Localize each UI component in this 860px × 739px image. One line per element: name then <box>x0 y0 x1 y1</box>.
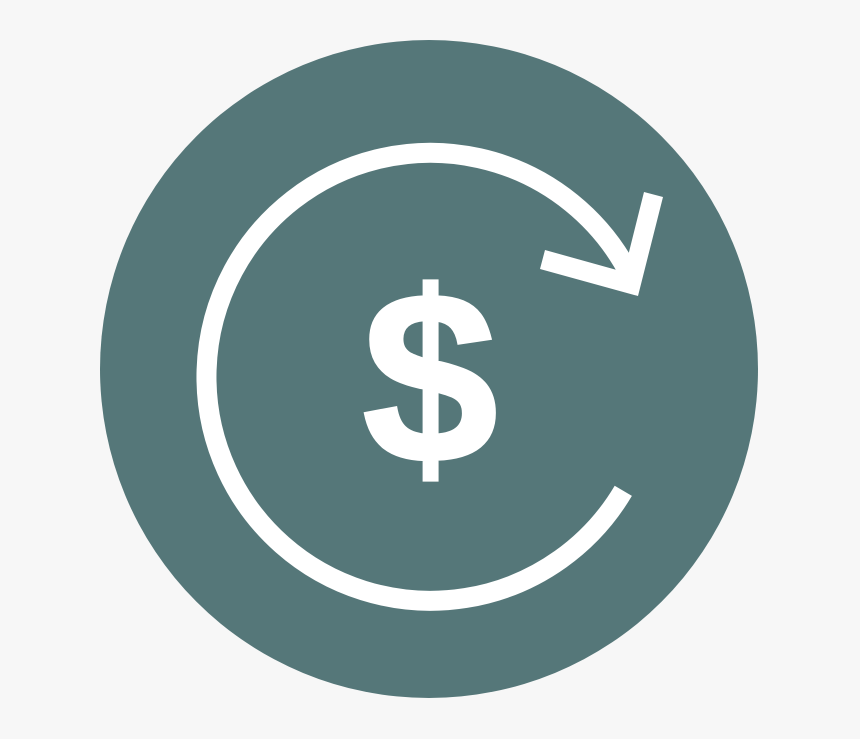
arrowhead <box>540 192 663 296</box>
circular arrow <box>206 153 663 601</box>
arc of circular arrow <box>206 153 630 601</box>
dollar sign: $ <box>362 241 498 514</box>
teal circle background <box>100 40 758 698</box>
